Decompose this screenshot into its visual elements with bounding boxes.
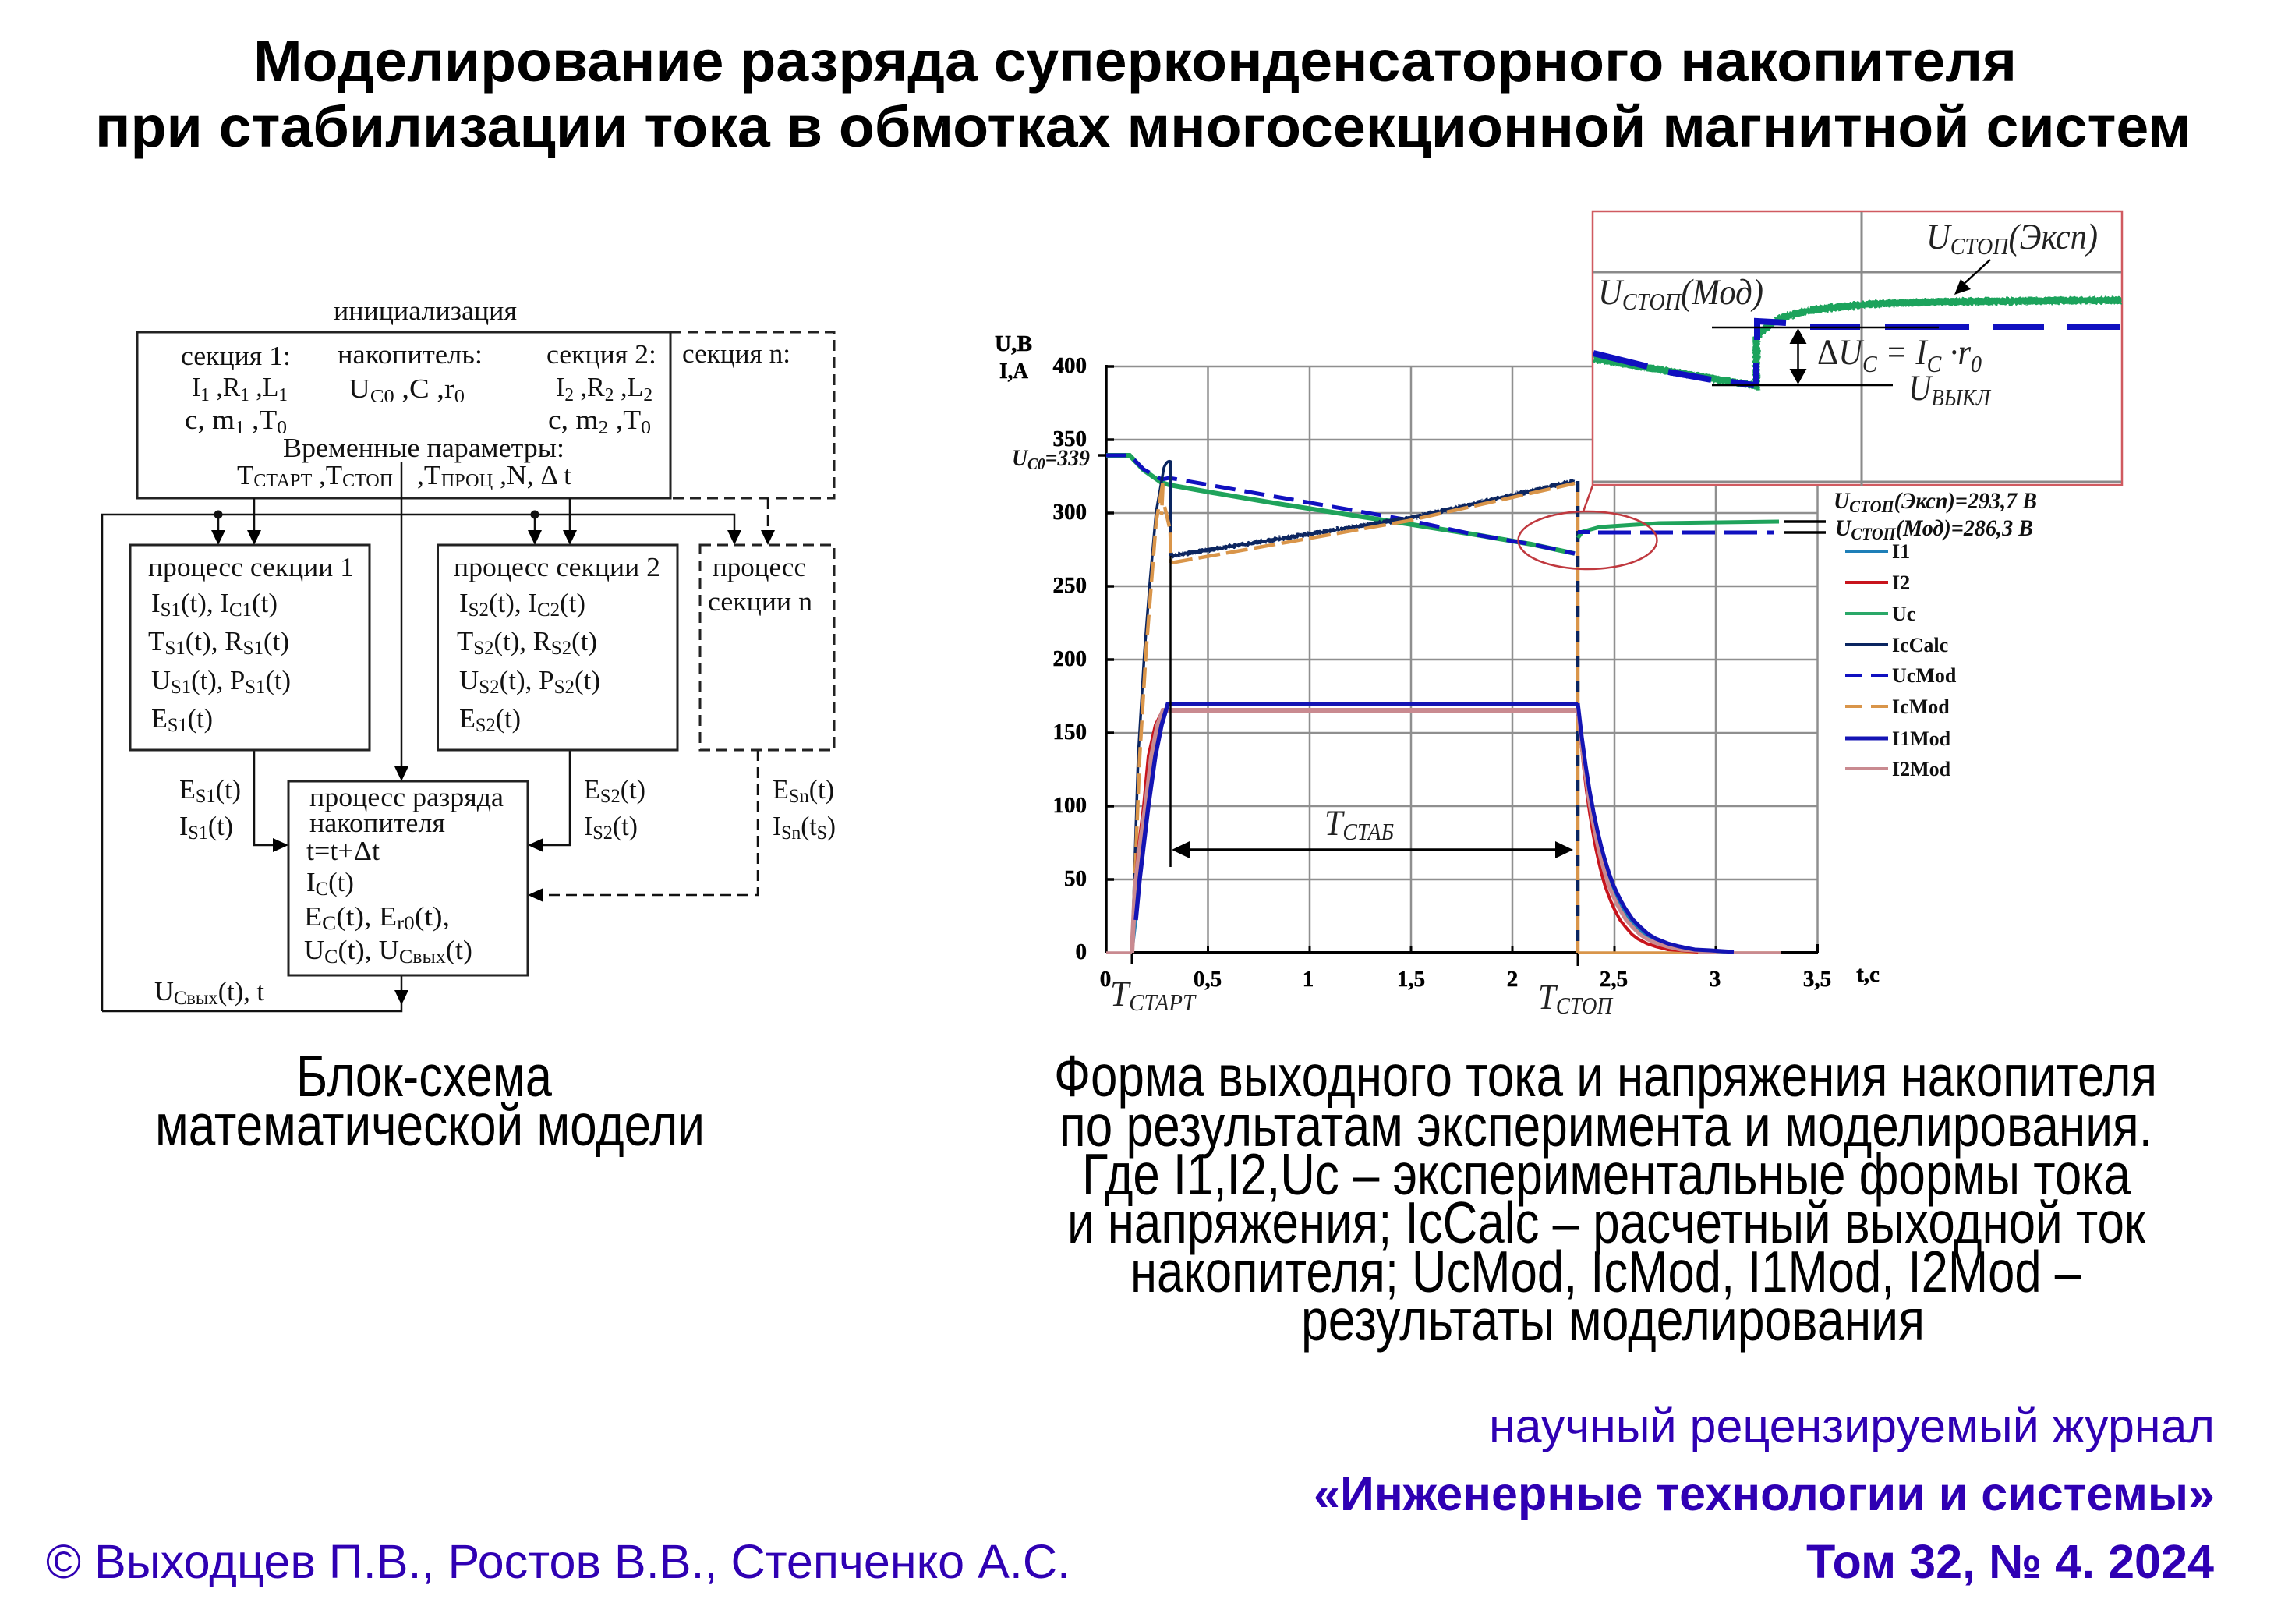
inset labels: ΔU — [1817, 332, 1865, 373]
panel: section 2 process: (t) — [560, 588, 585, 618]
panel: initialization block: U — [348, 373, 368, 404]
axis labels and tick values: U — [1012, 445, 1029, 471]
inset labels: 0 — [1971, 350, 1982, 377]
panel: section 1 process: U — [151, 665, 171, 695]
connectors: feedback bus and arrows — [102, 462, 775, 1011]
flowchart: block diagram of the mathematical model — [102, 295, 836, 1011]
inset labels: U — [1908, 368, 1935, 409]
panel: initialization block: 2 — [643, 385, 652, 405]
heading: initialization: инициализация — [334, 295, 517, 326]
footer: journal name and issue: научный рецензируемый журнал — [1489, 1399, 2215, 1452]
inset labels: = I — [1877, 332, 1929, 373]
axis labels and tick values: =339 — [1045, 445, 1090, 471]
panel: initialization block: I — [192, 372, 201, 402]
inset curve: Uc experimental — [1593, 300, 2121, 386]
panel: section 1 process: (t) — [188, 703, 213, 734]
axis labels and tick values: C0 — [1027, 455, 1045, 473]
legend: I1 — [1892, 540, 1910, 563]
panel: section 2 process: S2 — [551, 638, 571, 659]
chart: output current and voltage waveforms — [995, 211, 2122, 1019]
panel: initialization block: c, m — [548, 405, 595, 435]
panel: section 1 process: T — [148, 626, 164, 656]
panel: initialization block: ,R — [210, 372, 241, 402]
panel: storage discharge process — [288, 781, 528, 975]
title: Моделирование разряда суперконденсаторного накопителя — [253, 29, 2017, 94]
panel: section 2 process: (t) — [496, 703, 521, 734]
panel: initialization block: ,L — [614, 372, 643, 402]
panel: initialization block: 2 — [605, 385, 614, 405]
signal labels: Cвых — [174, 988, 218, 1009]
curve: IcCalc falling edge — [1576, 481, 1579, 953]
panel: initialization block: секция 2: — [546, 339, 656, 370]
signal labels: (t) — [216, 774, 241, 805]
caption: block diagram: математической модели — [155, 1092, 705, 1158]
panel: initialization block: 1 — [200, 385, 210, 405]
inset labels: СТОП — [1950, 232, 2010, 260]
panel: section n process — [700, 545, 834, 750]
axis labels and tick values: 0 — [1076, 939, 1087, 964]
stop voltage labels: СТОП — [1849, 497, 1894, 516]
caption: waveform description: результаты моделирования — [1301, 1287, 1925, 1353]
panel: section 1 process: I — [151, 588, 161, 618]
footer: journal name and issue: «Инженерные технологии и системы» — [1314, 1467, 2215, 1520]
signal labels: E — [773, 774, 789, 805]
panel: initialization block: накопитель: — [338, 339, 483, 370]
inset annotation lines — [1712, 260, 1990, 385]
signal labels: E — [179, 774, 196, 805]
axis labels and tick values: 1,5 — [1397, 967, 1425, 992]
panel: initialization block: 1 — [235, 418, 245, 438]
signal labels: (t) — [621, 774, 645, 805]
signal labels: I — [773, 811, 782, 841]
inset labels — [1598, 217, 2098, 411]
panel: storage discharge process: накопителя — [309, 808, 445, 838]
panel: section 1 process: (t), P — [191, 665, 245, 695]
axis labels and tick values: 1 — [1303, 967, 1314, 992]
panel: section 1 process: (t) — [263, 626, 289, 656]
stop voltage labels: U — [1835, 515, 1852, 541]
label: T start: T — [1110, 974, 1130, 1014]
axis labels and tick values: 300 — [1052, 500, 1087, 525]
panel: initialization block: ,T — [417, 460, 440, 490]
curve: I1Mod — [1136, 703, 1734, 952]
panel: section 2 process: S2 — [476, 715, 496, 736]
panel: storage discharge process: (t) — [328, 867, 354, 897]
panel: initialization block: 0 — [277, 418, 287, 438]
axis labels and tick values — [995, 331, 1880, 992]
signal labels: (t) — [208, 811, 233, 841]
panel: section 1 process: S1 — [161, 600, 181, 621]
panel: initialization block: секция 1: — [181, 341, 291, 371]
panel: section 2 process: T — [457, 626, 473, 656]
curve: Uc experimental — [1106, 455, 1575, 554]
inset labels: U — [1598, 272, 1625, 313]
panel: initialization block: 1 — [278, 385, 288, 405]
curves after stop — [1578, 522, 1826, 538]
panel: storage discharge process: r0 — [397, 913, 415, 934]
stabilization interval marker: T — [1324, 803, 1345, 844]
panel: section 2 process: процесс секции 2 — [454, 552, 660, 582]
panel: section 2 process: S2 — [469, 600, 489, 621]
axis labels and tick values: U,B — [995, 331, 1032, 356]
footer: journal name and issue: Том 32, № 4. 2024 — [1806, 1535, 2214, 1588]
panel: section 1 process — [130, 545, 370, 750]
inset labels: C — [1927, 350, 1942, 377]
panel: section 1 process: S1 — [168, 715, 188, 736]
axis labels and tick values: 250 — [1052, 573, 1087, 598]
axis labels and tick values: 150 — [1052, 720, 1087, 745]
panel: section 1 process: S1 — [245, 677, 265, 698]
signal labels: S2 — [600, 786, 621, 807]
caption: waveform description: накопителя; UcMod, IcMod, I1Mod, I2Mod – — [1130, 1239, 2081, 1304]
footer: authors: © Выходцев П.В., Ростов В.В., Степченко А.С. — [46, 1535, 1070, 1588]
legend: I2 — [1892, 571, 1910, 594]
signal labels: (t) — [809, 774, 834, 805]
panel: storage discharge process: (t), — [415, 901, 450, 932]
signal labels: (t) — [613, 811, 638, 841]
panel: initialization block: 1 — [240, 385, 249, 405]
panel: section 1 process: (t), I — [181, 588, 229, 618]
panel: section n process: секции n — [708, 586, 812, 617]
panel: section 2 process: S2 — [479, 677, 500, 698]
curve: I2Mod — [1132, 709, 1716, 953]
panel: section 2 process: (t), P — [500, 665, 554, 695]
panel: storage discharge process: C — [316, 879, 328, 900]
panel: section 2 process: E — [459, 703, 476, 734]
panel: initialization block: ,C ,r — [394, 373, 454, 404]
curve: IcMod — [1132, 481, 1578, 953]
panel: storage discharge process: (t), E — [336, 901, 397, 932]
panel: section 2 process: S2 — [554, 677, 575, 698]
axis labels and tick values: 50 — [1064, 866, 1087, 891]
panel: section 2 process: (t), R — [493, 626, 552, 656]
signal labels: (t — [801, 811, 817, 841]
legend: Uc — [1892, 603, 1915, 625]
panel: initialization block: 2 — [564, 385, 574, 405]
panel: section 1 process: (t) — [252, 588, 278, 618]
axis labels and tick values: 0,5 — [1194, 967, 1222, 992]
label: T stop: T — [1538, 977, 1558, 1017]
signal labels: (t), t — [218, 976, 264, 1007]
panel: section n dashed block: секция n: — [682, 338, 790, 369]
panel: storage discharge process: U — [304, 935, 324, 965]
axis labels and tick values: 3,5 — [1803, 967, 1831, 992]
panel: initialization block: ПРОЦ — [441, 471, 493, 491]
panel: section 2 process: I — [459, 588, 469, 618]
curve: IcCalc — [1132, 462, 1575, 953]
legend: IcCalc — [1892, 634, 1948, 656]
callout: red ellipse — [1519, 483, 1657, 569]
baseline traces at zero — [1106, 951, 1781, 954]
axis labels and tick values: 100 — [1052, 793, 1087, 818]
panel: section 1 process: C1 — [229, 600, 252, 621]
signal labels: S — [817, 823, 827, 844]
inset labels: (Эксп) — [2008, 217, 2098, 257]
panel: initialization block: I — [556, 372, 565, 402]
axis labels and tick values: 400 — [1052, 353, 1087, 378]
axis labels and tick values: 3 — [1710, 967, 1721, 992]
axis labels and tick values: 2,5 — [1600, 967, 1628, 992]
panel: initialization block: c, m — [185, 405, 232, 435]
signal labels: E — [584, 774, 600, 805]
axis labels and tick values: 200 — [1052, 646, 1087, 671]
legend: I1Mod — [1892, 727, 1951, 750]
footer: journal name and issue — [1314, 1399, 2215, 1588]
panel: section 1 process: S1 — [171, 677, 191, 698]
signal labels: Sn — [789, 786, 809, 807]
panel: initialization block: ,T — [608, 405, 641, 435]
inset curve: UcMod — [1593, 321, 2120, 385]
panel: initialization block: ,T — [312, 460, 342, 490]
axis labels and tick values: t,c — [1856, 962, 1880, 987]
legend — [1845, 540, 1957, 780]
curve: I2 rise and fall — [1132, 708, 1698, 953]
panel: section 2 process — [438, 545, 677, 750]
panel: initialization block: ,R — [574, 372, 605, 402]
panel: section 1 process: процесс секции 1 — [148, 552, 354, 582]
signal labels: S2 — [592, 823, 613, 844]
panel: storage discharge process: C — [324, 946, 338, 968]
panel: section 2 process: (t), I — [489, 588, 537, 618]
panel: section 1 process: E — [151, 703, 168, 734]
inset labels: ·r — [1941, 332, 1972, 373]
panel: storage discharge process: C — [322, 913, 336, 934]
panel: section 2 process: U — [459, 665, 479, 695]
panel: initialization block: 2 — [599, 418, 608, 438]
stabilization interval marker — [1171, 556, 1573, 867]
panel: section 1 process: S1 — [243, 638, 263, 659]
panel: initialization block: ,T — [245, 405, 277, 435]
panel: section 1 process: (t), R — [186, 626, 243, 656]
stop voltage labels: (Эксп)=293,7 В — [1894, 488, 2037, 514]
legend: I2Mod — [1892, 758, 1951, 780]
panel: section n dashed block — [670, 332, 834, 498]
panel: storage discharge process: (t), U — [338, 935, 399, 965]
panel: initialization block: 0 — [454, 387, 465, 407]
panel: storage discharge process: процесс разряда — [309, 782, 504, 812]
panel: section 2 process: (t) — [575, 665, 600, 695]
panel: initialization block: 0 — [641, 418, 651, 438]
panel: initialization block: T — [237, 460, 253, 490]
panel: section 2 process: S2 — [473, 638, 493, 659]
caption: waveform description — [1054, 1043, 2157, 1353]
signal labels: ) — [827, 811, 836, 841]
panel: section 1 process: S1 — [164, 638, 186, 659]
signal labels: I — [179, 811, 189, 841]
stop voltage labels: U — [1834, 488, 1851, 514]
inset labels: C — [1862, 350, 1877, 377]
panel: storage discharge process: E — [304, 901, 320, 932]
label: T start: СТАРТ — [1129, 989, 1197, 1016]
signal labels — [154, 774, 836, 1009]
axes and tick marks — [1098, 365, 1818, 966]
panel: section 1 process: (t) — [265, 665, 291, 695]
caption: block diagram — [155, 1043, 705, 1158]
panel: section 2 process: (t) — [571, 626, 597, 656]
panel: storage discharge process: Cвых — [399, 946, 446, 968]
legend: UcMod — [1892, 664, 1957, 687]
panel: section 2 process: C2 — [537, 600, 560, 621]
panel: initialization block: ,N, Δ t — [493, 460, 571, 490]
signal labels: S1 — [188, 823, 208, 844]
inset: zoomed detail at stop moment — [1593, 211, 2122, 486]
signal labels: Sn — [781, 823, 801, 844]
panel: initialization block: ,L — [249, 372, 278, 402]
chart grid — [1106, 366, 1818, 953]
inset labels: (Мод) — [1681, 272, 1763, 313]
panel: initialization block — [137, 332, 670, 498]
panel: section n process: процесс — [713, 552, 806, 582]
signal labels: S1 — [196, 786, 216, 807]
axis labels and tick values: 2 — [1507, 967, 1518, 992]
stabilization interval marker: СТАБ — [1342, 818, 1394, 845]
axis labels and tick values: I,A — [999, 359, 1028, 384]
title: при стабилизации тока в обмотках многосекционной магнитной систем — [95, 94, 2191, 159]
curve: I1 — [1132, 704, 1725, 953]
label: T stop: СТОП — [1556, 992, 1613, 1019]
panel: initialization block: СТАРТ — [253, 471, 313, 491]
stop voltage labels: (Мод)=286,3 В — [1896, 515, 2033, 541]
title — [95, 29, 2191, 159]
panel: initialization block: СТОП — [342, 471, 393, 491]
caption: block diagram: Блок-схема — [296, 1043, 552, 1109]
inset labels: СТОП — [1622, 288, 1682, 315]
stop voltage labels: СТОП — [1851, 524, 1897, 543]
inset labels: ВЫКЛ — [1931, 384, 1992, 411]
axis labels and tick values: 0 — [1100, 967, 1111, 992]
inset labels: U — [1926, 217, 1953, 257]
panel: storage discharge process: t=t+Δt — [306, 836, 380, 866]
panel: initialization block: Временные параметры: — [283, 433, 564, 463]
stop voltage labels — [1834, 488, 2037, 543]
axis labels and tick values: 350 — [1052, 426, 1087, 451]
signal labels: I — [584, 811, 593, 841]
panel: initialization block: C0 — [370, 387, 394, 407]
panel: storage discharge process: (t) — [446, 935, 472, 965]
signal labels: U — [154, 976, 174, 1007]
panel: storage discharge process: I — [306, 867, 316, 897]
legend: IcMod — [1892, 695, 1950, 718]
curve: UcMod — [1106, 455, 1575, 554]
